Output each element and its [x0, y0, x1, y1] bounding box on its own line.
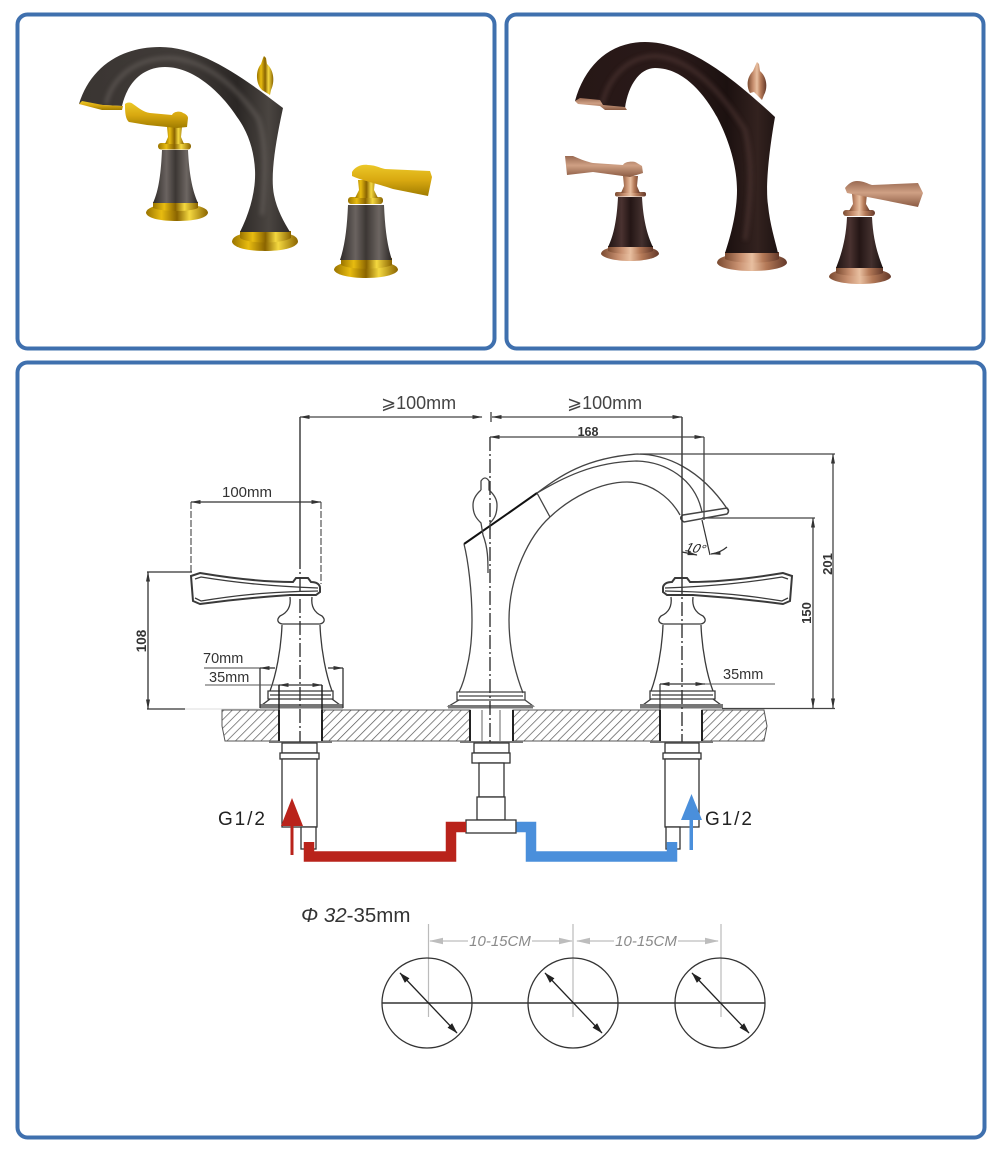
dimension: 35mm left hole [205, 670, 322, 710]
dimension: second hole spacing: 10-15CM [615, 933, 677, 950]
line drawing: lever knob [473, 478, 497, 535]
panel: bronze and gold faucet photo [18, 14, 494, 348]
line drawing: lower fittings [269, 741, 713, 849]
hole layout diagram [382, 924, 765, 1048]
dimension: 100mm handle length: 100mm [222, 484, 272, 501]
dimension: 150 height: 150 [799, 602, 814, 624]
icon: rose faucet spout [575, 42, 787, 271]
icon: gold faucet spout [79, 47, 298, 251]
dimension: 35mm right hole [660, 667, 775, 710]
hole circle 1 [382, 958, 472, 1048]
line drawing: central spout [448, 454, 728, 708]
dimension: first hole spacing: 10-15CM [469, 933, 531, 950]
icon: rose faucet right handle [829, 181, 923, 284]
hole circle 3 [675, 958, 765, 1048]
countertop cross-section [222, 710, 767, 741]
dimension: 201 height: 201 [820, 553, 835, 575]
dimension: 70mm base: 70mm [203, 651, 243, 667]
dimension: 35mm right hole: 35mm [723, 667, 763, 683]
hole circle 2 [528, 958, 618, 1048]
dimension: 168 spout reach: 168 [578, 425, 598, 439]
icon: gold faucet knob [257, 56, 273, 95]
cold water pipe [516, 827, 672, 856]
dimension: right 100mm spacing: ⩾100mm [567, 393, 642, 413]
label: hole diameter: Φ 32-35mm [301, 904, 410, 927]
dimension: 10 degree spray angle [682, 520, 727, 556]
label: G1/2 left: G1/2 [218, 809, 267, 830]
dimension: first hole spacing [430, 932, 572, 950]
dimension: 70mm base [203, 651, 343, 708]
panel: oil-rubbed and rose gold faucet photo [506, 14, 984, 348]
dimension: 108 handle height [134, 572, 260, 709]
dimension: 35mm left hole: 35mm [209, 670, 249, 686]
line drawing: right handle and valve [640, 573, 792, 708]
dimension: 100mm handle length [191, 484, 321, 584]
hot water pipe [309, 827, 466, 856]
centre lines [300, 417, 682, 742]
icon: gold faucet right handle [334, 165, 432, 278]
icon: gold faucet left handle [125, 102, 208, 221]
dimension: left 100mm spacing: ⩾100mm [381, 393, 456, 413]
dimension: second hole spacing [577, 932, 718, 950]
arrow: hot water inlet [281, 798, 303, 855]
label: G1/2 right: G1/2 [705, 809, 754, 830]
dimension: 108 handle height: 108 [134, 629, 149, 652]
dimension: 10 degree spray angle: 10° [683, 540, 709, 556]
icon: rose faucet left handle [565, 156, 659, 261]
line drawing: left handle and valve [191, 573, 343, 708]
panel: technical drawing [18, 362, 984, 1138]
base line [722, 708, 835, 710]
icon: rose faucet knob [748, 62, 766, 100]
arrow: cold water inlet [681, 794, 702, 850]
